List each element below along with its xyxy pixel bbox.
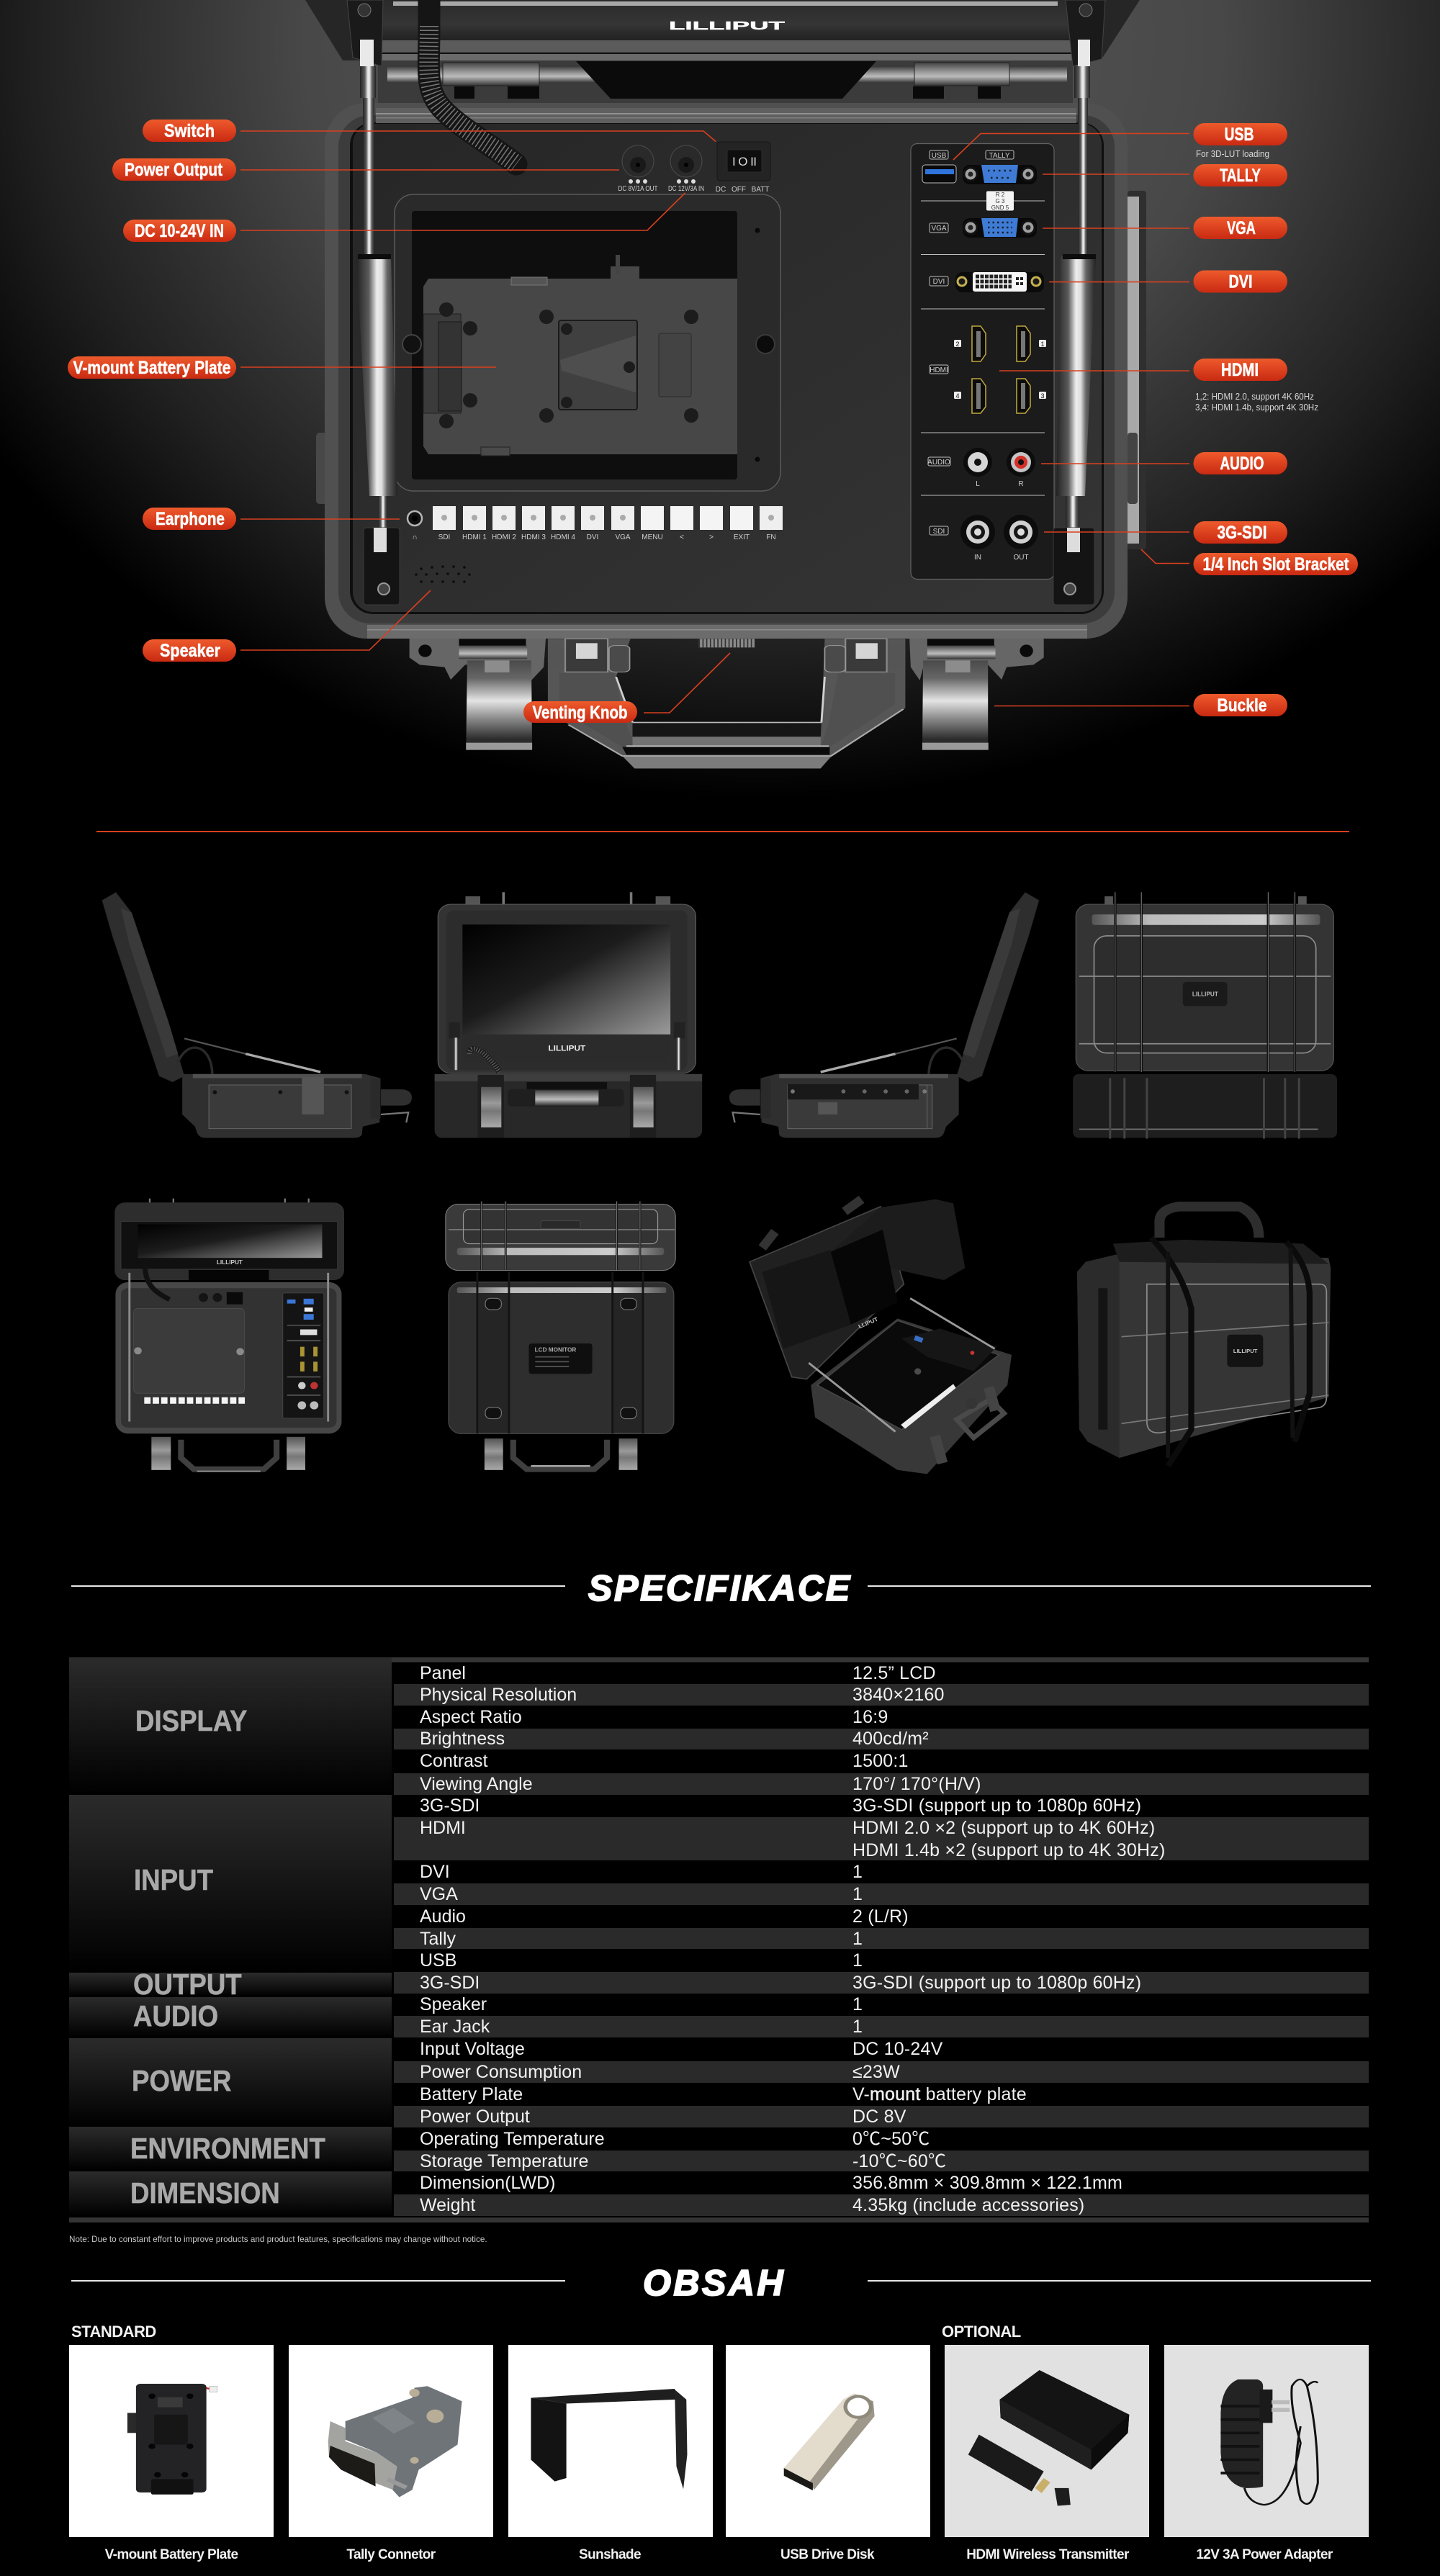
row: Aspect Ratio bbox=[420, 1707, 888, 1727]
row: Input Voltage bbox=[420, 2039, 943, 2059]
connector panel: 2 bbox=[955, 341, 960, 348]
row: 3G-SDI output bbox=[394, 1972, 1368, 1994]
power jacks and switch: BATT bbox=[752, 186, 769, 194]
note: HDMI versions bbox=[1195, 391, 1318, 413]
category: INPUT bbox=[69, 1795, 392, 1972]
row: Operating Temperature: 0℃~50℃ bbox=[852, 2128, 930, 2148]
title: SPECIFIKACE with rules: SPECIFIKACE bbox=[588, 1568, 852, 1608]
coiled cable bbox=[428, 0, 516, 164]
row: Contrast: 1500:1 bbox=[852, 1751, 909, 1771]
accessory cards backgrounds bbox=[69, 2345, 1369, 2537]
power jacks and switch: DC bbox=[716, 186, 726, 194]
row: Speaker: Speaker bbox=[420, 1994, 487, 2014]
callout: Earphone: Earphone bbox=[156, 509, 225, 529]
row: USB: 1 bbox=[852, 1950, 863, 1971]
connector panel: VGA bbox=[931, 225, 947, 233]
callout: Speaker bbox=[143, 639, 236, 662]
row: Power Output bbox=[394, 2106, 1368, 2127]
heading: STANDARD: STANDARD bbox=[71, 2323, 156, 2341]
carry handle bbox=[548, 639, 905, 768]
callout: Switch bbox=[143, 120, 236, 142]
product views gallery bbox=[102, 892, 1337, 1474]
row: 3G-SDI input bbox=[420, 1796, 1141, 1816]
row: Dimension: 356.8mm × 309.8mm × 122.1mm bbox=[852, 2173, 1122, 2193]
background glow bbox=[0, 0, 1440, 828]
row: Viewing Angle: Viewing Angle bbox=[420, 1774, 533, 1794]
button row with labels: HDMI 3 bbox=[521, 533, 546, 541]
caption: Sunshade: Sunshade bbox=[579, 2547, 641, 2562]
row: Physical Resolution: Physical Resolution bbox=[420, 1685, 577, 1705]
row: 3G-SDI input: 3G-SDI bbox=[420, 1796, 480, 1816]
note: HDMI versions: 3,4: HDMI 1.4b, support 4K 30Hz bbox=[1195, 402, 1318, 413]
callout: Switch: Switch bbox=[164, 121, 215, 141]
connector panel: GND 5 bbox=[991, 204, 1009, 211]
caption: 12V 3A Power Adapter: 12V 3A Power Adapter bbox=[1196, 2547, 1333, 2562]
row: 3G-SDI input: 3G-SDI (support up to 1080p 60Hz) bbox=[852, 1796, 1141, 1816]
row: Input Voltage: DC 10-24V bbox=[852, 2039, 942, 2059]
heading: OPTIONAL: OPTIONAL bbox=[942, 2323, 1021, 2341]
accessory product images bbox=[127, 2370, 1319, 2505]
hero panel: open case with labelled callouts bbox=[0, 0, 1440, 769]
callout: DVI: DVI bbox=[1228, 272, 1253, 292]
button row with labels: SDI bbox=[438, 533, 450, 541]
left gas strut bbox=[347, 0, 400, 605]
callout: USB bbox=[1194, 123, 1287, 145]
power jacks and switch: DC 12V/3A IN bbox=[668, 185, 704, 193]
row: VGA: VGA bbox=[420, 1884, 458, 1904]
row: Storage Temperature bbox=[394, 2150, 1368, 2171]
connector panel: R 2 bbox=[996, 192, 1005, 198]
button row with labels: HDMI 1 bbox=[462, 533, 487, 541]
button row with labels: > bbox=[709, 533, 714, 541]
callout: VGA: VGA bbox=[1227, 218, 1256, 238]
callout: USB: USB bbox=[1224, 125, 1254, 145]
callout: HDMI bbox=[1194, 359, 1287, 381]
callout: V-mount Battery Plate: V-mount Battery Plate bbox=[73, 358, 231, 378]
row: Brightness bbox=[394, 1729, 1368, 1749]
image: V-mount battery plate bbox=[127, 2384, 217, 2495]
note: USB use: For 3D-LUT loading bbox=[1196, 148, 1269, 159]
note: HDMI versions: 1,2: HDMI 2.0, support 4K 60Hz bbox=[1195, 391, 1314, 402]
row: Tally: Tally bbox=[420, 1928, 456, 1948]
callout: AUDIO bbox=[1194, 452, 1287, 474]
product view: open, side left bbox=[102, 892, 412, 1138]
row: Power Consumption: Power Consumption bbox=[420, 2062, 582, 2082]
button row with labels: EXIT bbox=[734, 533, 750, 541]
note under table: Note: Due to constant effort to improve products and product features, specifications may change without notice. bbox=[69, 2235, 487, 2244]
caption: Tally Connetor: Tally Connetor bbox=[346, 2547, 436, 2562]
callout: TALLY bbox=[1194, 164, 1287, 186]
row: Contrast bbox=[420, 1751, 909, 1771]
row: Operating Temperature: Operating Temperature bbox=[420, 2128, 605, 2148]
power jacks and switch bbox=[618, 142, 770, 194]
row: Tally: 1 bbox=[852, 1928, 863, 1948]
row: USB bbox=[420, 1950, 863, 1971]
connector panel: 4 bbox=[955, 392, 960, 400]
battery recess with V-mount plate bbox=[395, 194, 780, 491]
product view: open, front bbox=[435, 892, 702, 1138]
image: HDMI wireless transmitter bbox=[968, 2370, 1129, 2506]
row: VGA bbox=[394, 1883, 1368, 1905]
row: VGA: 1 bbox=[852, 1884, 863, 1904]
category: POWER bbox=[69, 2038, 392, 2127]
caption: V-mount Battery Plate: V-mount Battery Plate bbox=[105, 2547, 238, 2562]
callout: VGA bbox=[1194, 217, 1287, 239]
row: Tally bbox=[394, 1928, 1368, 1949]
product view: closed, angled bbox=[1077, 1207, 1331, 1466]
case body bbox=[316, 103, 1146, 639]
callout: HDMI: HDMI bbox=[1221, 360, 1259, 380]
row: Power Output: DC 8V bbox=[852, 2107, 906, 2127]
callout: Venting Knob: Venting Knob bbox=[533, 703, 628, 723]
row: Contrast: Contrast bbox=[420, 1751, 487, 1771]
category: OUTPUT bbox=[69, 1973, 392, 1996]
caption: HDMI Wireless Transmitter: HDMI Wireless Transmitter bbox=[966, 2547, 1129, 2562]
row: Viewing Angle: 170°/ 170°(H/V) bbox=[852, 1774, 981, 1794]
venting knob bbox=[698, 639, 755, 647]
row: Storage Temperature: Storage Temperature bbox=[420, 2151, 588, 2171]
row: Audio bbox=[420, 1906, 909, 1927]
row: Weight: Weight bbox=[420, 2195, 475, 2215]
callout: 3G-SDI: 3G-SDI bbox=[1217, 523, 1267, 543]
row: Panel: Panel bbox=[420, 1663, 466, 1683]
callout: DVI bbox=[1194, 271, 1287, 292]
category: ENVIRONMENT: ENVIRONMENT bbox=[130, 2132, 325, 2165]
row: Panel bbox=[420, 1663, 936, 1683]
row: Battery Plate: Battery Plate bbox=[420, 2084, 523, 2104]
connector panel: USB bbox=[932, 152, 947, 160]
button row with labels: VGA bbox=[615, 533, 631, 541]
row: Physical Resolution: 3840×2160 bbox=[852, 1685, 945, 1705]
connector panel: 1 bbox=[1040, 341, 1045, 348]
row: HDMI: HDMI bbox=[420, 1818, 466, 1838]
image: 12V 3A power adapter bbox=[1220, 2379, 1318, 2505]
product view: closed, back with open lid bbox=[1073, 892, 1337, 1139]
row: HDMI: HDMI 2.0 ×2 (support up to 4K 60Hz) bbox=[852, 1818, 1155, 1838]
row: Speaker bbox=[420, 1994, 863, 2014]
callout: Speaker: Speaker bbox=[160, 641, 220, 661]
product view: rear, open lid and label bbox=[446, 1202, 675, 1470]
title: OBSAH with rules: OBSAH bbox=[643, 2263, 786, 2303]
category: ENVIRONMENT bbox=[69, 2127, 392, 2171]
category: AUDIO: AUDIO bbox=[133, 1999, 218, 2032]
row: Physical Resolution bbox=[394, 1684, 1368, 1706]
button row with labels: MENU bbox=[642, 533, 663, 541]
button row with labels: FN bbox=[766, 533, 776, 541]
hinge area bbox=[378, 60, 1073, 108]
row: Panel: 12.5” LCD bbox=[852, 1663, 936, 1683]
connector panel: TALLY bbox=[989, 152, 1010, 160]
connector panel: OUT bbox=[1013, 554, 1029, 562]
callout leader lines bbox=[240, 131, 1189, 713]
row: HDMI bbox=[394, 1817, 1368, 1860]
callout: TALLY: TALLY bbox=[1220, 166, 1261, 186]
power jacks and switch: OFF bbox=[732, 186, 746, 194]
row: Dimension: Dimension(LWD) bbox=[420, 2173, 555, 2193]
category: DISPLAY bbox=[69, 1657, 392, 1795]
row: Brightness: 400cd/m² bbox=[852, 1729, 929, 1749]
row: Brightness: Brightness bbox=[420, 1729, 505, 1749]
lid with bezel bbox=[305, 0, 1140, 60]
button row with labels bbox=[408, 506, 783, 541]
buckles bbox=[410, 639, 1044, 750]
connector panel: R bbox=[1018, 480, 1024, 488]
connector panel: SDI bbox=[933, 528, 945, 536]
right gas strut bbox=[1053, 0, 1105, 605]
red divider bbox=[96, 831, 1349, 832]
button row with labels: ∩ bbox=[412, 533, 418, 541]
row: Power Output: Power Output bbox=[420, 2107, 530, 2127]
row: DVI: 1 bbox=[852, 1862, 863, 1882]
image: USB drive bbox=[784, 2394, 875, 2490]
callout: Power Output: Power Output bbox=[125, 160, 223, 180]
category: INPUT: INPUT bbox=[134, 1863, 213, 1896]
row: 3G-SDI output: 3G-SDI (support up to 1080p 60Hz) bbox=[852, 1973, 1141, 1993]
product view: rear, open lid and label: LCD MONITOR bbox=[535, 1347, 577, 1353]
product view: open, front: LILLIPUT bbox=[549, 1044, 586, 1053]
category: DIMENSION: DIMENSION bbox=[130, 2176, 280, 2210]
row: Storage Temperature: -10℃~60℃ bbox=[852, 2151, 946, 2171]
row: Power Consumption: ≤23W bbox=[852, 2062, 900, 2082]
product view: closed, back with open lid: LILLIPUT bbox=[1192, 991, 1218, 997]
connector panel: AUDIO bbox=[927, 459, 950, 467]
connector panel: DVI bbox=[933, 278, 945, 286]
category: OUTPUT: OUTPUT bbox=[133, 1968, 242, 2001]
row: Input Voltage: Input Voltage bbox=[420, 2039, 525, 2059]
row: Aspect Ratio: Aspect Ratio bbox=[420, 1707, 522, 1727]
connector panel: 3 bbox=[1040, 392, 1045, 400]
callout: 1/4 Inch Slot Bracket: 1/4 Inch Slot Bracket bbox=[1202, 554, 1349, 575]
category: AUDIO bbox=[69, 1997, 392, 2037]
callout: Buckle bbox=[1194, 694, 1287, 716]
row: Audio: 2 (L/R) bbox=[852, 1906, 909, 1927]
button row with labels: HDMI 2 bbox=[492, 533, 516, 541]
connector panel bbox=[911, 144, 1054, 579]
image: sunshade bbox=[531, 2389, 687, 2489]
product view: closed, angled: LILLIPUT bbox=[1233, 1348, 1258, 1354]
row: Ear Jack: 1 bbox=[852, 2017, 863, 2037]
lid with bezel: LILLIPUT bbox=[669, 20, 786, 32]
row: Dimension bbox=[420, 2173, 1122, 2193]
row: DVI: DVI bbox=[420, 1862, 450, 1882]
row: Aspect Ratio: 16:9 bbox=[852, 1707, 888, 1727]
callout: AUDIO: AUDIO bbox=[1220, 454, 1264, 474]
power jacks and switch: DC 8V/1A OUT bbox=[618, 185, 658, 193]
product view: open, side right bbox=[729, 892, 1039, 1138]
row: Power Consumption bbox=[394, 2061, 1368, 2083]
row: Weight bbox=[394, 2194, 1368, 2216]
row: Weight: 4.35kg (include accessories) bbox=[852, 2195, 1084, 2215]
callout: Buckle: Buckle bbox=[1217, 695, 1267, 716]
row: Operating Temperature bbox=[420, 2128, 930, 2148]
category: POWER: POWER bbox=[132, 2064, 231, 2097]
category: DIMENSION bbox=[69, 2171, 392, 2216]
category: DISPLAY: DISPLAY bbox=[135, 1704, 247, 1737]
connector panel: HDMI bbox=[930, 366, 948, 374]
connector panel: L bbox=[976, 480, 980, 488]
row: USB: USB bbox=[420, 1950, 456, 1971]
row: 3G-SDI output: 3G-SDI bbox=[420, 1973, 480, 1993]
row: Battery Plate: V-mount battery plate bbox=[852, 2084, 1027, 2104]
product view: top, open with controls bbox=[114, 1199, 344, 1471]
row: Viewing Angle bbox=[394, 1773, 1368, 1794]
row: HDMI: HDMI 1.4b ×2 (support up to 4K 30Hz) bbox=[852, 1840, 1165, 1860]
product view: angled open with sunshade bbox=[750, 1199, 1012, 1474]
callout: 3G-SDI bbox=[1194, 521, 1287, 544]
row: Battery Plate bbox=[420, 2084, 1027, 2104]
caption: USB Drive Disk: USB Drive Disk bbox=[780, 2547, 874, 2562]
row: DVI bbox=[420, 1862, 863, 1882]
product view: angled open with sunshade: LLIPUT bbox=[858, 1316, 879, 1330]
power jacks and switch: I O II bbox=[732, 155, 757, 168]
speaker grille bbox=[415, 565, 471, 583]
row: Ear Jack bbox=[394, 2016, 1368, 2037]
row: Speaker: 1 bbox=[852, 1994, 863, 2014]
product view: top, open with controls: LILLIPUT bbox=[217, 1259, 243, 1266]
row: Ear Jack: Ear Jack bbox=[420, 2017, 490, 2037]
row: Audio: Audio bbox=[420, 1906, 466, 1927]
image: tally connector bbox=[328, 2386, 462, 2497]
connector panel: G 3 bbox=[996, 198, 1005, 204]
callout: DC 10-24V IN: DC 10-24V IN bbox=[135, 221, 224, 241]
button row with labels: HDMI 4 bbox=[551, 533, 575, 541]
button row with labels: DVI bbox=[587, 533, 598, 541]
button row with labels: < bbox=[680, 533, 684, 541]
connector panel: IN bbox=[974, 554, 981, 562]
